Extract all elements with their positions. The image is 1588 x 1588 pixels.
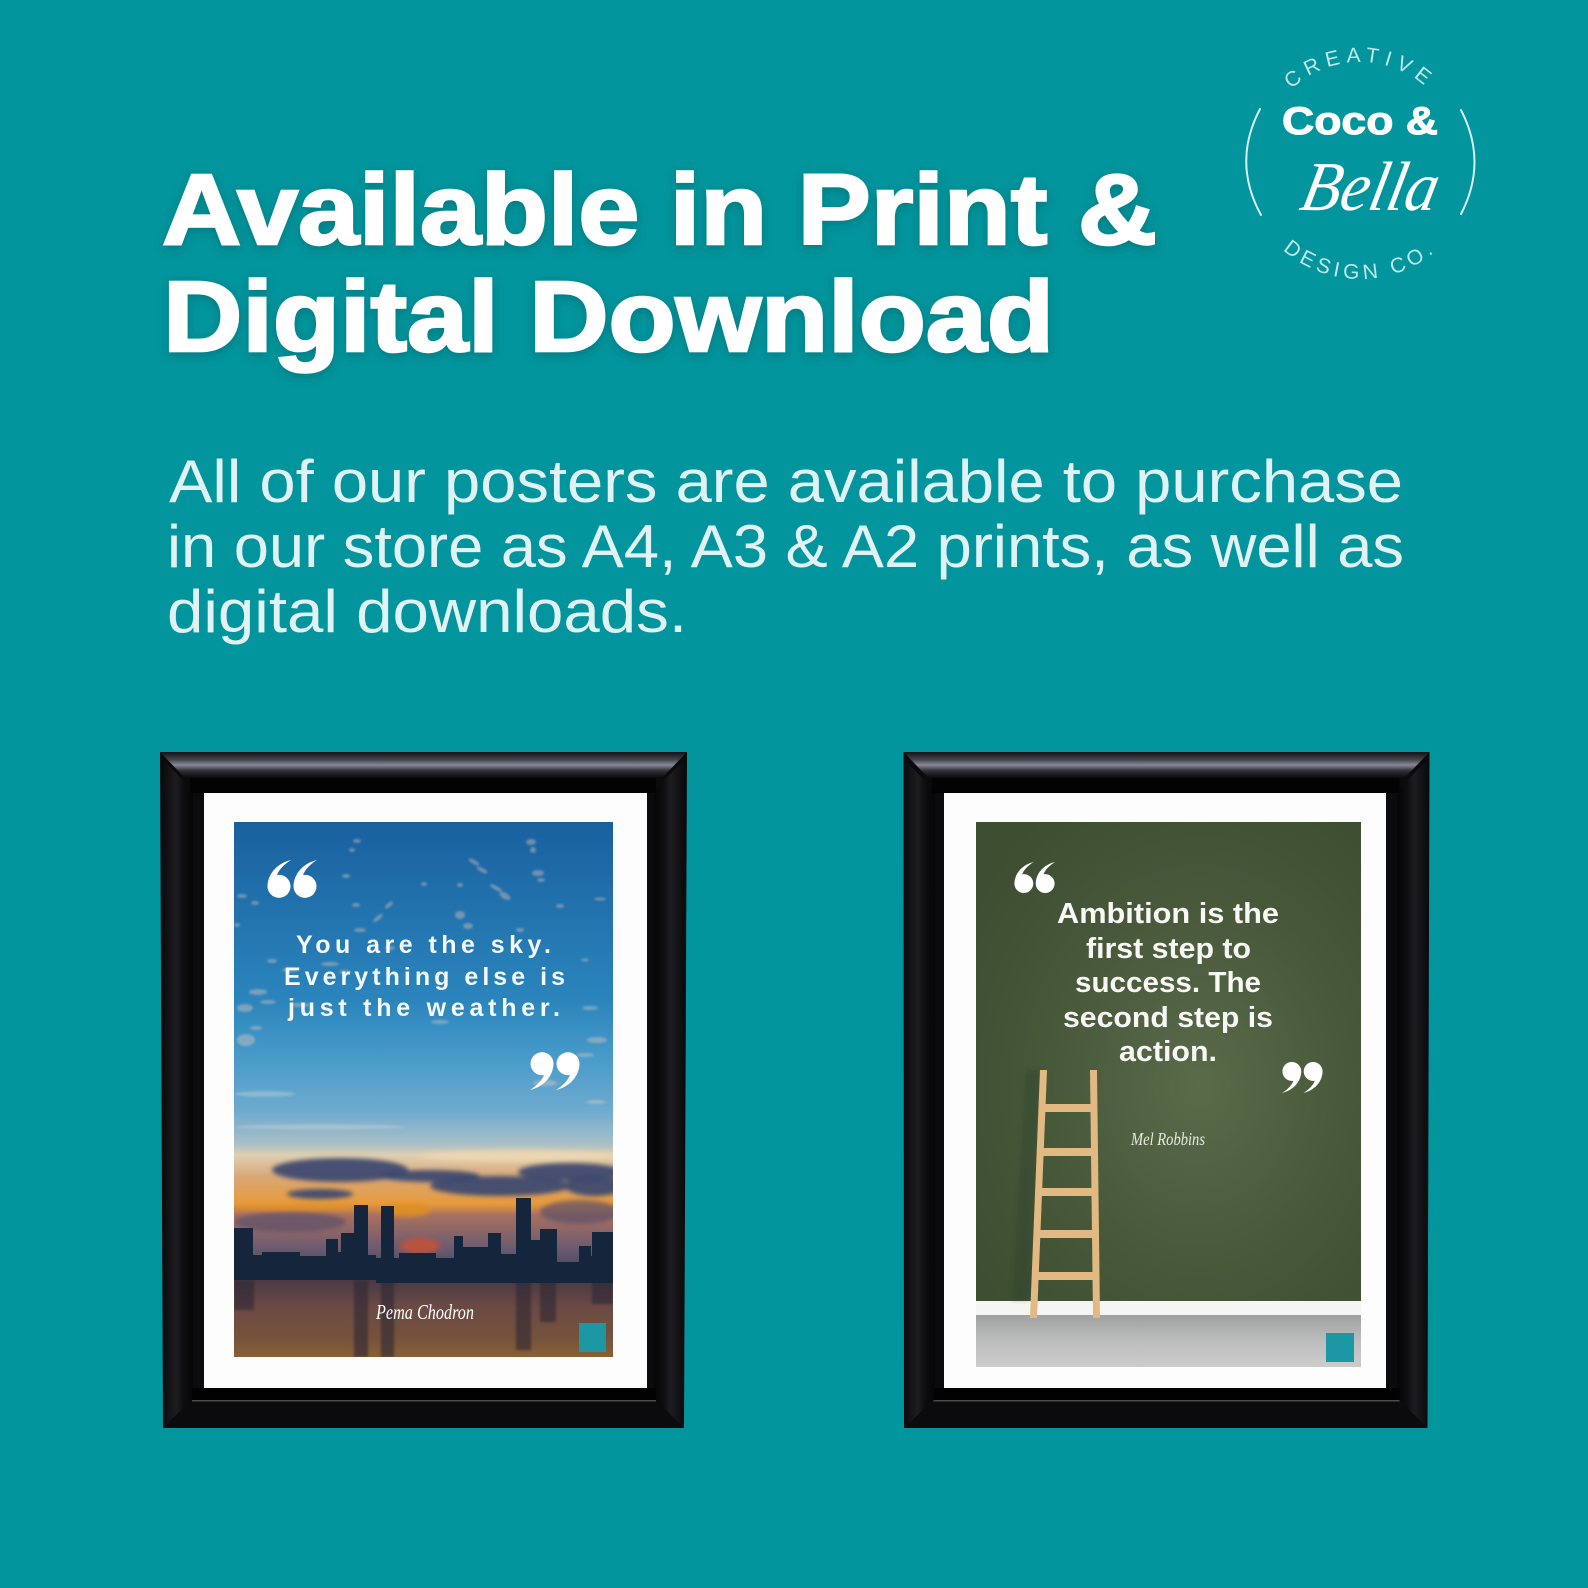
reflections (234, 1280, 613, 1357)
quote text: Everything else is (284, 963, 565, 991)
body text: in our store as A4, A3 & A2 prints, as well as (167, 513, 1404, 580)
right framed poster (904, 752, 1430, 1428)
city skyline (234, 1198, 613, 1283)
quote text: You are the sky. (296, 931, 551, 959)
opening quote mark (1014, 862, 1055, 893)
dark sunset clouds (272, 1158, 625, 1199)
frame (904, 752, 1430, 1428)
horizon light streaks (235, 1091, 405, 1130)
quote text: just the weather. (287, 994, 560, 1022)
quote text: action. (1119, 1036, 1217, 1068)
closing quote mark (1282, 1062, 1323, 1093)
body text: All of our posters are available to purchase (169, 448, 1403, 515)
opening quote mark (267, 860, 317, 898)
quote text: Ambition is the (1057, 898, 1279, 930)
logo text: Bella: Bella (1295, 149, 1447, 226)
white mat (944, 793, 1386, 1388)
logo text: Coco &: Coco & (1282, 100, 1438, 143)
floor (976, 1315, 1361, 1367)
quote text: success. The (1075, 967, 1261, 999)
ladder (1030, 1070, 1100, 1318)
small logo badge (1326, 1333, 1354, 1362)
small logo badge (579, 1323, 606, 1352)
body text (167, 448, 1404, 645)
logo: Coco & Bella Design Co. (1245, 47, 1476, 280)
title: Digital Download (163, 261, 1054, 373)
logo text: design co: DESIGN CO. (1284, 240, 1432, 280)
title: Available in Print & (162, 154, 1157, 266)
left framed poster (160, 752, 687, 1428)
logo text: creative: CREATIVE (1286, 47, 1432, 86)
author: Mel Robbins: Mel Robbins (1130, 1129, 1205, 1149)
quote text: second step is (1063, 1002, 1273, 1034)
scattered clouds (234, 839, 607, 1104)
quote text (1057, 898, 1279, 1068)
poster: green wall (976, 822, 1361, 1301)
water (234, 1280, 613, 1357)
skirting board (976, 1301, 1361, 1315)
author: Pema Chodron: Pema Chodron (375, 1300, 474, 1324)
closing quote mark (530, 1052, 580, 1090)
white mat (204, 793, 647, 1388)
body text: digital downloads. (167, 578, 687, 645)
quote text (284, 931, 565, 1022)
frame (160, 752, 687, 1428)
quote text: first step to (1086, 933, 1251, 965)
title (162, 154, 1157, 373)
logo ring arcs (1246, 109, 1474, 215)
poster: sky photo (234, 822, 625, 1357)
ladder shadow (1012, 1070, 1040, 1300)
